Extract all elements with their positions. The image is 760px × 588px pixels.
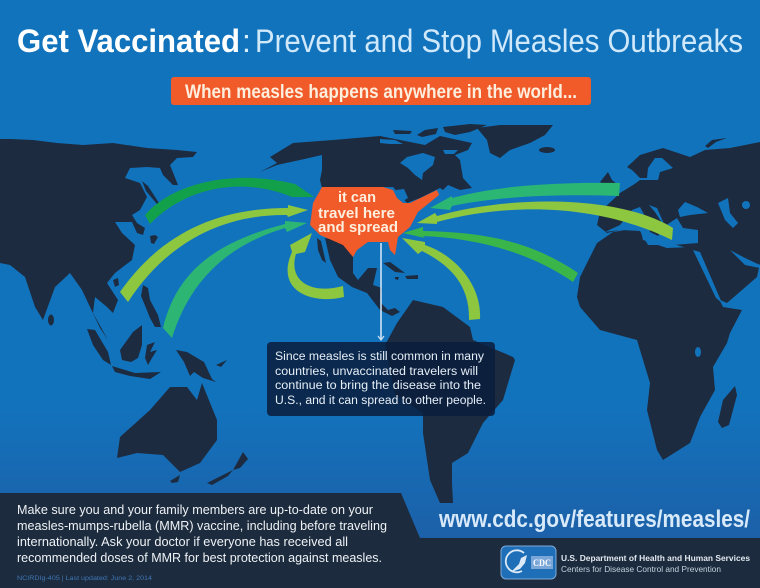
title bbox=[17, 23, 743, 59]
advice text bbox=[17, 502, 387, 565]
arrow: Mexico loop lime bbox=[288, 233, 344, 299]
icon: CDC logo: CDC bbox=[533, 558, 551, 568]
map: Greenland and Iceland bbox=[477, 125, 555, 158]
map: Eurasia west bbox=[597, 142, 760, 303]
label: it can travel here and spread: and spread bbox=[318, 219, 398, 236]
advice text: measles-mumps-rubella (MMR) vaccine, including before traveling bbox=[17, 518, 387, 533]
callout: measles still common: countries, unvaccinated travelers will bbox=[275, 366, 478, 378]
orange banner: When measles happens anywhere in the world... bbox=[185, 82, 577, 103]
map: Novaya Zemlya bbox=[705, 138, 727, 148]
arrow: Europe teal bbox=[430, 183, 620, 210]
arrow: Middle East lime bbox=[417, 201, 673, 240]
map: Hudson Bay and channels bbox=[380, 139, 458, 201]
map: inland seas bbox=[605, 198, 760, 357]
publication note: NCIRDIg-405 | Last updated: June 2, 2014 bbox=[17, 576, 153, 582]
footer band bbox=[0, 493, 760, 588]
advice text: recommended doses of MMR for best protection against measles. bbox=[17, 550, 382, 565]
arrow: Africa green bbox=[403, 227, 578, 282]
map: Baja bbox=[317, 238, 326, 263]
map: Africa bbox=[577, 228, 742, 460]
map: Asia bbox=[0, 139, 197, 340]
advice text: Make sure you and your family members are up-to-date on your bbox=[17, 502, 374, 517]
callout: measles still common: continue to bring the disease into the bbox=[275, 380, 481, 392]
map: South America bbox=[385, 300, 515, 503]
world map bbox=[0, 124, 760, 503]
callout: measles still common: Since measles is still common in many bbox=[275, 351, 484, 363]
arrow: Pacific teal bbox=[163, 221, 307, 338]
label: it can travel here and spread: travel here bbox=[318, 205, 395, 222]
map: Madagascar bbox=[718, 386, 737, 428]
title: : bbox=[242, 23, 251, 59]
agency name bbox=[561, 553, 750, 574]
map: North America bbox=[260, 136, 472, 203]
orange banner bbox=[171, 77, 591, 105]
callout: measles still common bbox=[267, 342, 495, 416]
map: Asian islands bbox=[48, 181, 227, 382]
map: Caribbean bbox=[383, 262, 418, 280]
icon: CDC logo bbox=[501, 546, 556, 579]
advice text: internationally. Ask your doctor if everyone has received all bbox=[17, 534, 348, 549]
title: Get Vaccinated bbox=[17, 23, 240, 59]
arrow: East Asia dark green bbox=[145, 178, 314, 224]
agency name: Centers for Disease Control and Prevention bbox=[561, 564, 721, 574]
United States in orange bbox=[310, 187, 439, 257]
arrow: Southeast Asia lime bbox=[120, 205, 308, 302]
arrow: South America lime bbox=[402, 238, 480, 320]
map: United Kingdom bbox=[600, 172, 617, 186]
map: Mexico and Central America bbox=[325, 238, 400, 316]
map: Arctic islands bbox=[393, 124, 487, 137]
map: Australia and New Zealand bbox=[117, 383, 248, 485]
agency name: U.S. Department of Health and Human Services bbox=[561, 553, 750, 563]
callout: measles still common: U.S., and it can spread to other people. bbox=[275, 395, 486, 407]
arrow: white pointer to callout bbox=[378, 243, 384, 340]
label: it can travel here and spread bbox=[318, 189, 398, 236]
label: it can travel here and spread: it can bbox=[338, 189, 376, 206]
